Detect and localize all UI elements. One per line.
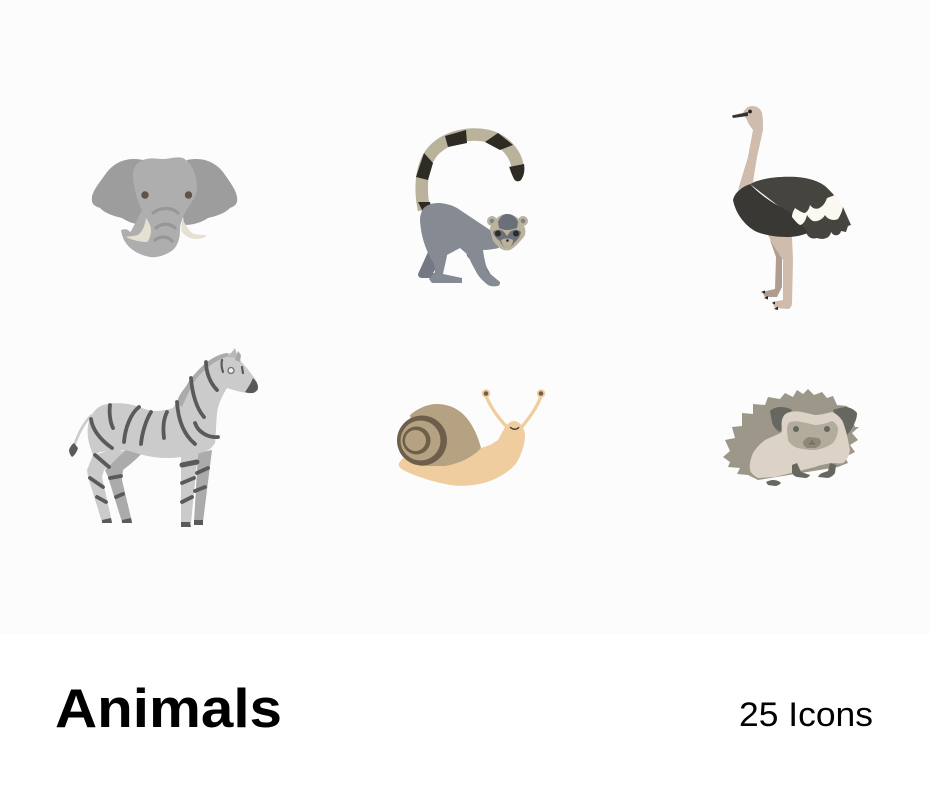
lemur body and near legs bbox=[420, 203, 500, 286]
icon: elephant bbox=[92, 157, 237, 257]
title: Animals bbox=[55, 677, 282, 739]
icon: lemur bbox=[416, 130, 528, 286]
lemur tail bbox=[416, 130, 524, 212]
lemur far legs bbox=[418, 252, 447, 278]
icon count label: 25 Icons bbox=[739, 696, 873, 734]
icon: hedgehog bbox=[723, 389, 859, 486]
zebra tail bbox=[74, 415, 92, 446]
zebra stripes bbox=[90, 360, 243, 502]
icon: ostrich bbox=[732, 106, 851, 310]
icon: zebra bbox=[69, 348, 258, 527]
icon: snail bbox=[397, 389, 545, 486]
zebra hooves bbox=[102, 518, 203, 527]
snail antennae bbox=[486, 396, 541, 428]
